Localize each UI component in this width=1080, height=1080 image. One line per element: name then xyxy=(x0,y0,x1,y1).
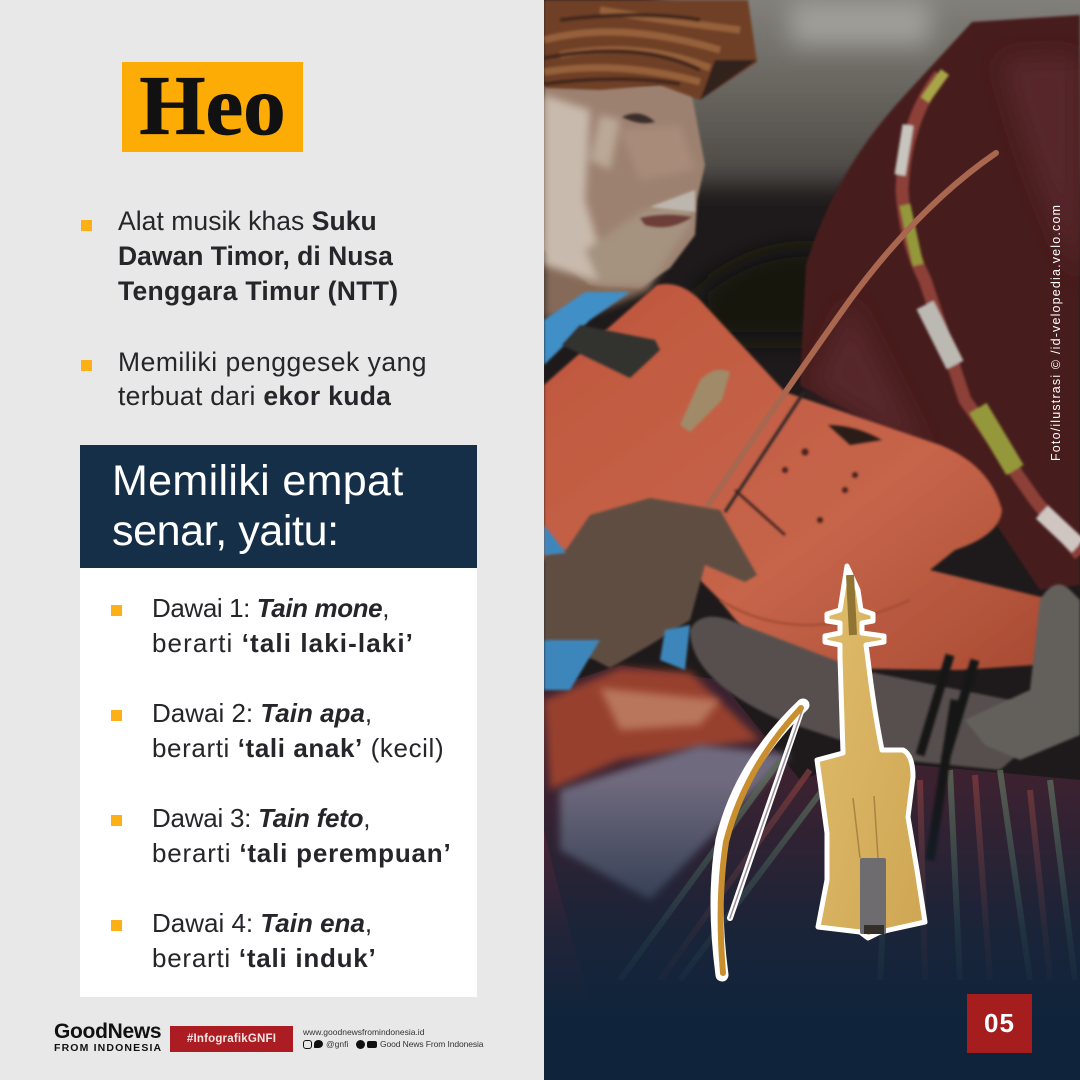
panel: list of strings xyxy=(80,568,477,997)
bullet 1 text xyxy=(118,206,398,306)
string 1 xyxy=(111,593,414,658)
panel heading: four strings: senar, yaitu: xyxy=(112,507,339,555)
footer social links: @gnfi xyxy=(326,1039,348,1049)
bullet 2 icon xyxy=(81,360,92,371)
string 2: berarti ‘tali anak’ (kecil) xyxy=(152,733,444,763)
eye and mouth xyxy=(622,113,695,227)
man face xyxy=(544,85,705,288)
panel heading: four strings xyxy=(80,445,477,568)
lower textile xyxy=(544,665,1080,1080)
bow in photo xyxy=(708,153,996,505)
blue sleeve xyxy=(544,525,690,690)
bullet 2 text xyxy=(118,347,427,411)
bottom fade xyxy=(544,780,1080,1080)
bullet 1 text: Alat musik khas Suku xyxy=(118,206,377,236)
man forearm xyxy=(690,617,1040,770)
footer social links xyxy=(303,1027,484,1049)
hashtag badge: #InfografikGNFI xyxy=(187,1033,276,1045)
fiddle details: bridge, holes xyxy=(562,325,910,625)
bullet 1 text: Tenggara Timur (NTT) xyxy=(118,276,398,306)
string 4 xyxy=(111,908,376,973)
robe fold shading xyxy=(810,55,1080,460)
string 2: Dawai 2: Tain apa, xyxy=(152,698,372,728)
panel heading: four strings: Memiliki empat xyxy=(112,457,404,505)
logo: GoodNews From Indonesia xyxy=(54,1020,162,1054)
bullet 1 text: Dawan Timor, di Nusa xyxy=(118,241,393,271)
title box: Heo xyxy=(139,59,286,153)
page number badge xyxy=(967,994,1032,1053)
hashtag badge xyxy=(170,1026,293,1052)
logo: GoodNews From Indonesia: FROM INDONESIA xyxy=(54,1042,162,1054)
dark strings on wrist xyxy=(920,655,975,860)
man neck and shoulder xyxy=(544,240,650,320)
photo base xyxy=(544,0,1080,1080)
page number badge: 05 xyxy=(984,1008,1015,1038)
bullet 2 text: terbuat dari ekor kuda xyxy=(118,381,391,411)
bullet 2 text: Memiliki penggesek yang xyxy=(118,347,427,377)
footer social links: Good News From Indonesia xyxy=(380,1039,483,1049)
heo bow cutout xyxy=(717,705,803,975)
string 1: berarti ‘tali laki-laki’ xyxy=(152,628,414,658)
panel: photo of heo player xyxy=(544,0,1080,1080)
string 2 xyxy=(111,698,444,763)
string 1: Dawai 1: Tain mone, xyxy=(152,593,389,623)
blue shirt collar xyxy=(544,292,630,365)
bullet 1 icon xyxy=(81,220,92,231)
maroon robe xyxy=(800,15,1080,590)
footer social links: www.goodnewsfromindonesia.id xyxy=(303,1027,424,1037)
turban xyxy=(544,0,757,100)
string 3: Dawai 3: Tain feto, xyxy=(152,803,370,833)
photo credit: Foto/ilustrasi © /id-velopedia.velo.com xyxy=(1049,205,1063,461)
string 4: berarti ‘tali induk’ xyxy=(152,943,376,973)
string 3 xyxy=(111,803,452,868)
string 3: berarti ‘tali perempuan’ xyxy=(152,838,452,868)
logo: GoodNews From Indonesia: GoodNews xyxy=(54,1020,161,1043)
string 4: Dawai 4: Tain ena, xyxy=(152,908,372,938)
face shading and beard xyxy=(544,95,695,285)
right hand xyxy=(965,584,1080,760)
playing hand xyxy=(544,498,757,668)
heo instrument cutout xyxy=(817,566,925,938)
beaded sash xyxy=(900,72,1080,555)
rock background xyxy=(660,0,1080,340)
fiddle body xyxy=(544,284,1045,670)
